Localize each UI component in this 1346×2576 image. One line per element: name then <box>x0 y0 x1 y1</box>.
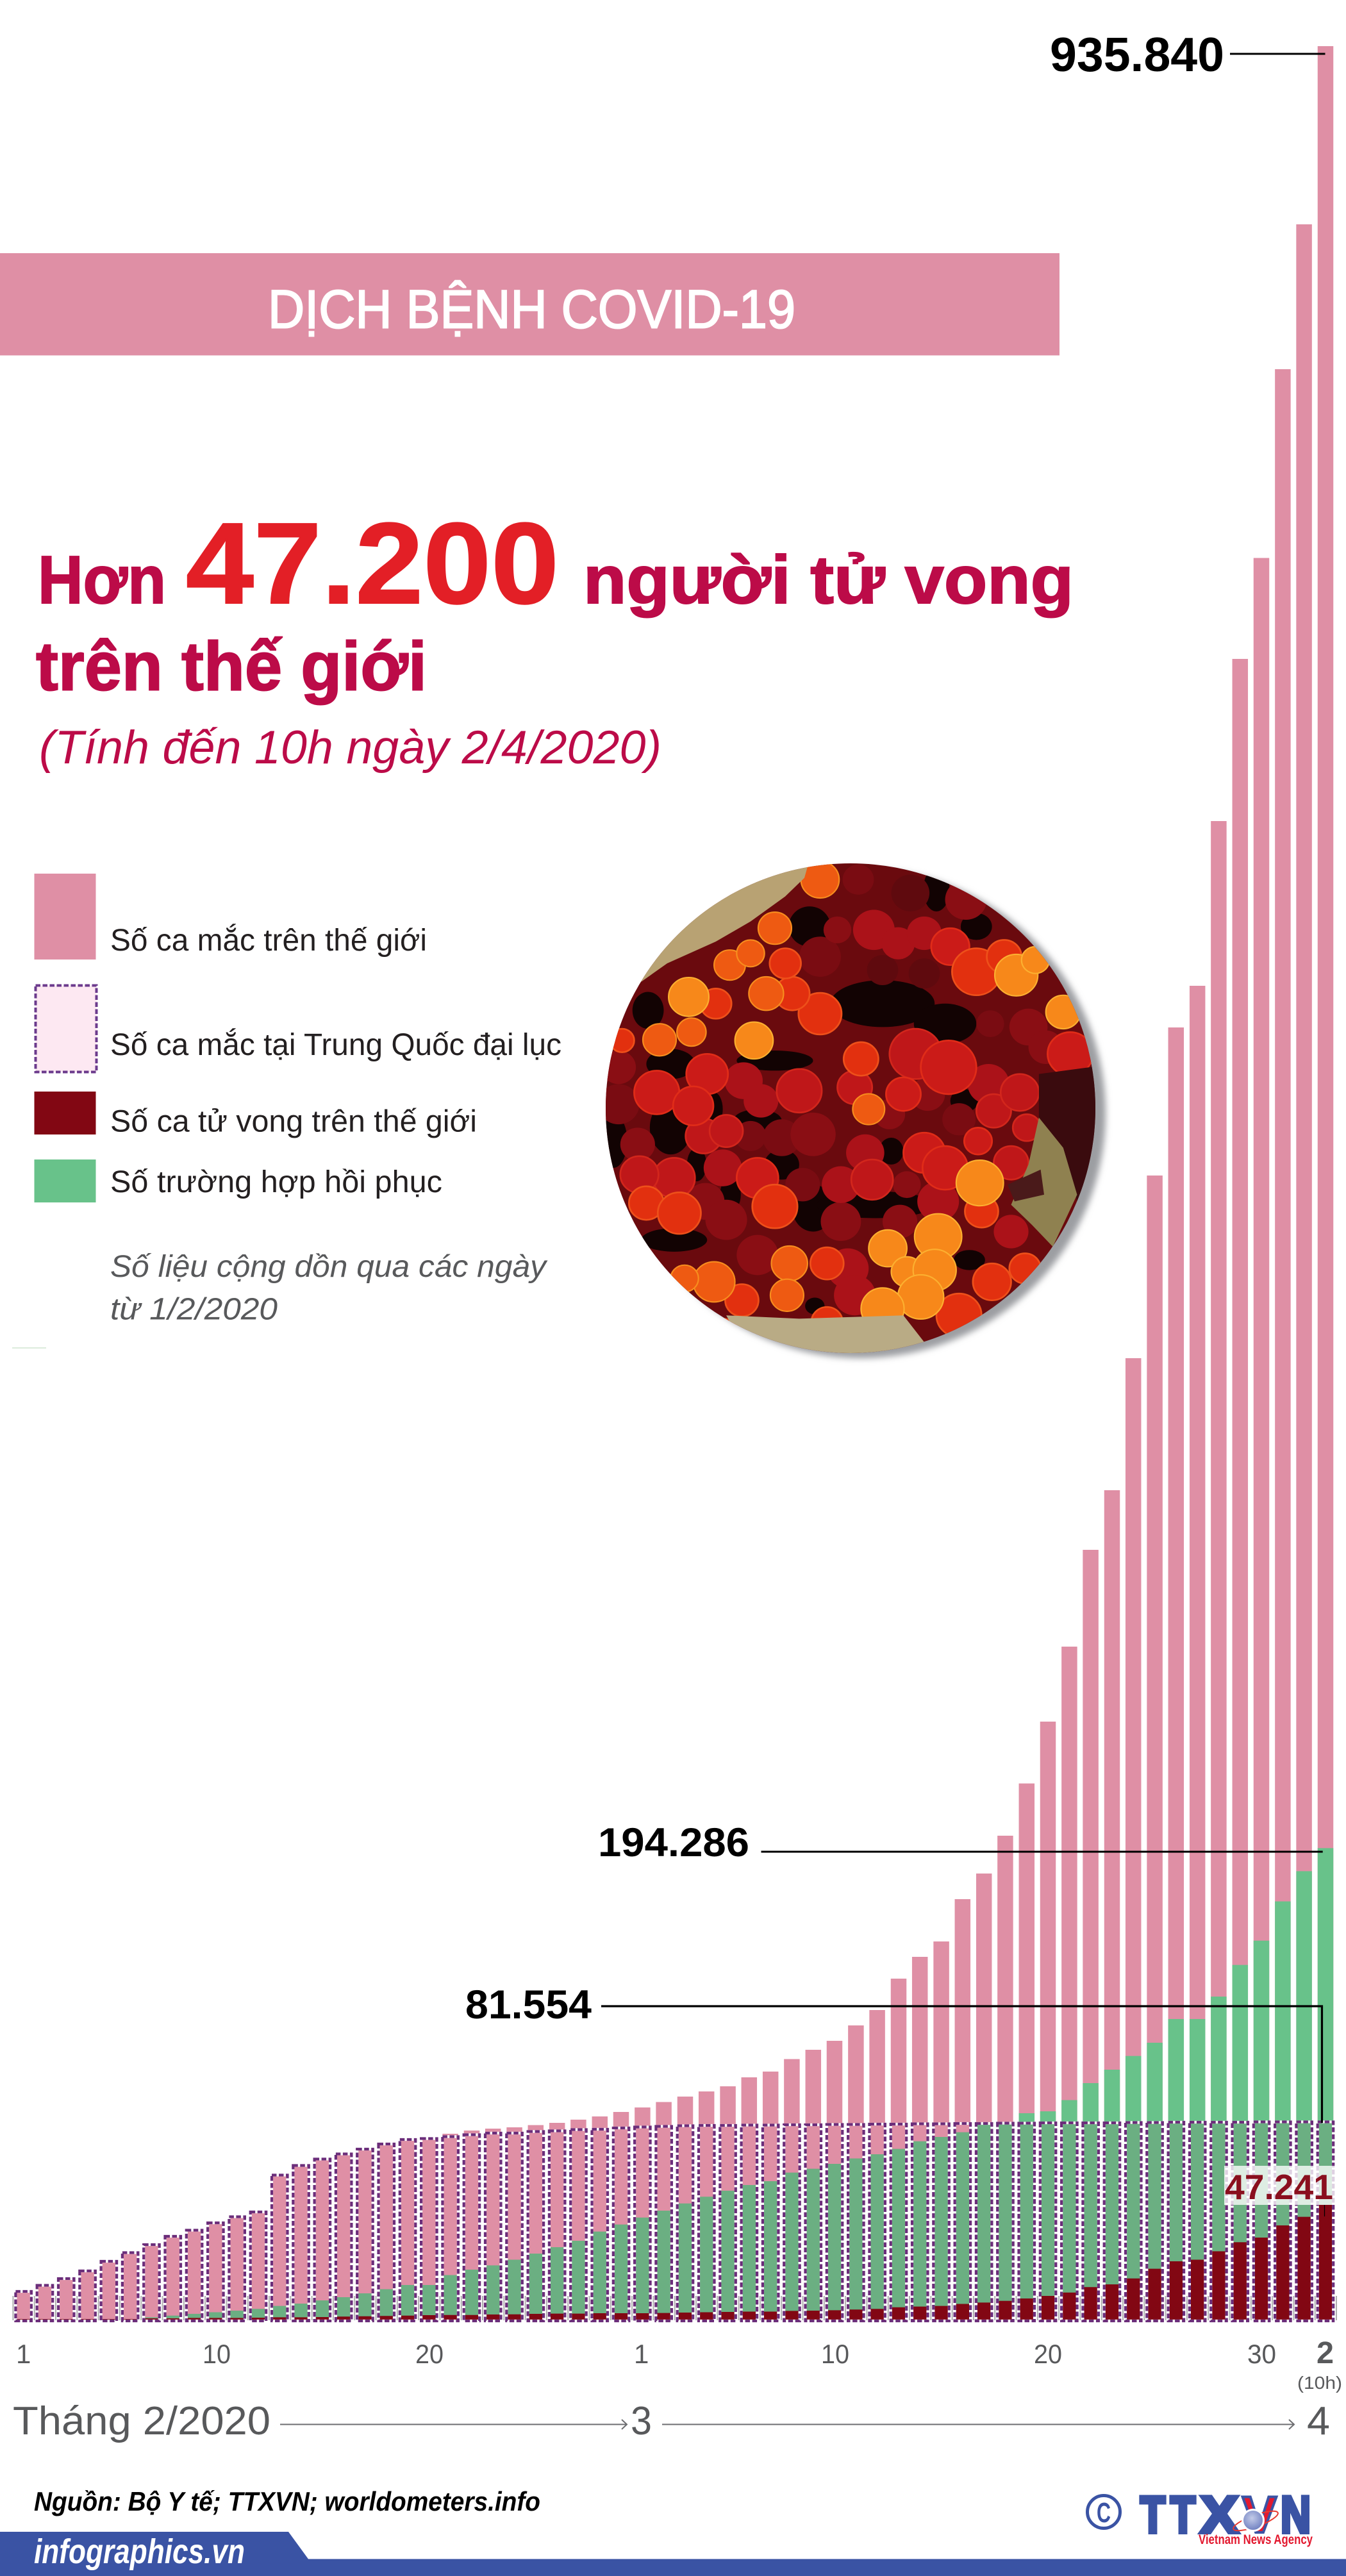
wordmark: T <box>1140 2486 1165 2544</box>
day labels on x axis: 1 <box>16 2339 31 2369</box>
green bars: recovered, above China band <box>1027 1848 1325 2123</box>
wordmark: V <box>1242 2486 1277 2544</box>
legend item: world cases: Số ca mắc trên thế giới <box>110 923 427 958</box>
footer band: infographics.vn <box>0 2532 1346 2576</box>
callout: 81.554: 81.554 <box>465 1982 592 2027</box>
wordmark: X <box>1201 2486 1238 2544</box>
legend item: mainland China cases <box>36 986 561 1072</box>
copyright mark: C <box>1097 2497 1111 2529</box>
title: 47.200 <box>186 499 559 628</box>
day labels on x axis: 20 <box>1034 2339 1062 2369</box>
dashed outlines: mainland China cases <box>15 2122 1333 2321</box>
callout: 935.840: 935.840 <box>1050 28 1224 81</box>
legend item: recovered <box>35 1159 442 1202</box>
legend item: world cases <box>35 874 427 960</box>
legend note: từ 1/2/2020 <box>110 1292 278 1327</box>
title: người tử vong <box>583 542 1074 618</box>
title: trên thế giới <box>36 627 427 705</box>
day labels on x axis: 20 <box>415 2339 444 2369</box>
title <box>36 499 1074 705</box>
virus micrograph circle <box>606 863 1110 1363</box>
legend note <box>110 1250 548 1327</box>
subtitle date: (Tính đến 10h ngày 2/4/2020) <box>39 722 661 774</box>
month timeline with arrows: Tháng 2/2020 <box>13 2399 270 2443</box>
day labels on x axis: 30 <box>1247 2339 1276 2369</box>
green bars: recovered, inside China band <box>151 2122 1325 2321</box>
TTXVN logo <box>1087 2486 1313 2547</box>
legend <box>35 874 561 1327</box>
month timeline with arrows: 4 <box>1307 2399 1330 2443</box>
wordmark <box>1140 2486 1311 2544</box>
day labels on x axis: 10 <box>821 2339 849 2369</box>
arrow to April <box>662 2420 1294 2429</box>
globe and orbit <box>1231 2507 1280 2534</box>
day labels on x axis: (10h) <box>1297 2373 1342 2393</box>
baseline ticks <box>13 2296 1336 2320</box>
callout: 194.286: 194.286 <box>598 1820 749 1865</box>
callout: 47.241: 47.241 <box>1225 2167 1333 2207</box>
source line: Nguồn: Bộ Y tế; TTXVN; worldometers.info <box>34 2486 540 2516</box>
dark red bars: deaths <box>24 2205 1325 2321</box>
copyright mark <box>1087 2496 1120 2529</box>
month timeline with arrows <box>13 2399 1330 2443</box>
legend item: deaths: Số ca tử vong trên thế giới <box>110 1105 477 1138</box>
legend note: Số liệu cộng dồn qua các ngày <box>110 1250 548 1284</box>
day labels on x axis <box>16 2336 1342 2393</box>
header band: DỊCH BỆNH COVID-19 <box>0 253 1059 355</box>
header band: DỊCH BỆNH COVID-19: DỊCH BỆNH COVID-19 <box>268 279 795 340</box>
legend item: mainland China cases: Số ca mắc tại Trung Quốc đại lục <box>110 1027 561 1062</box>
wordmark: T <box>1170 2486 1195 2544</box>
legend item: recovered: Số trường hợp hồi phục <box>110 1165 442 1199</box>
wordmark: N <box>1281 2486 1311 2544</box>
legend item: deaths <box>35 1092 477 1138</box>
agency name: Vietnam News Agency <box>1199 2532 1313 2547</box>
footer band: infographics.vn: infographics.vn <box>34 2532 245 2571</box>
callout: 81.554 <box>465 1982 1322 2123</box>
title: Hơn <box>38 542 166 618</box>
month timeline with arrows: 3 <box>631 2399 652 2443</box>
day labels on x axis: 1 <box>634 2339 649 2369</box>
day labels on x axis: 10 <box>203 2339 231 2369</box>
arrow to March <box>280 2420 627 2429</box>
day labels on x axis: 2 <box>1317 2336 1334 2370</box>
